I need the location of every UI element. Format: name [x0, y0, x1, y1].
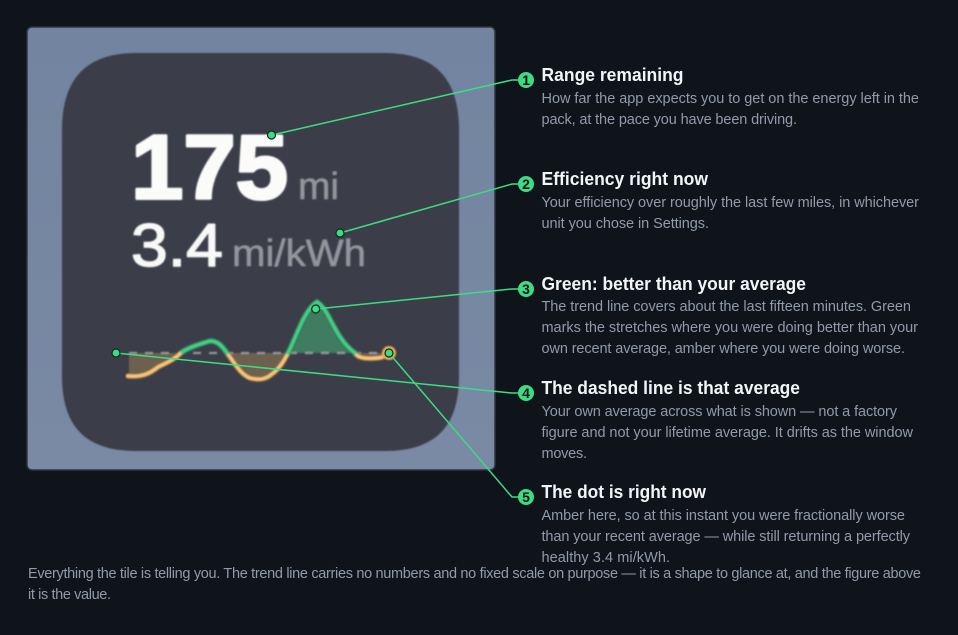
amber fill areas: [129, 352, 389, 379]
amber trend line: [128, 352, 389, 379]
caption: [28, 566, 921, 603]
rounded tile: [62, 53, 459, 451]
body 1: pack, at the pace you have been driving.: [542, 112, 797, 128]
efficiency figure: [131, 212, 366, 279]
green trend halo: [182, 302, 355, 353]
efficiency figure: 3.4: [131, 212, 223, 279]
body 5: Amber here, so at this instant you were fractionally worse: [542, 508, 905, 524]
body 4: [542, 404, 914, 462]
efficiency figure: mi/kWh: [232, 233, 366, 275]
panel: app tile screenshot: [27, 27, 495, 470]
badge 3: [518, 281, 534, 297]
body 5: [542, 508, 911, 566]
average dashed line: [129, 352, 389, 354]
callout 4: dashed line: [518, 378, 914, 462]
badge 4: [518, 385, 534, 401]
green fill area: [288, 302, 355, 353]
badge 2: [518, 176, 534, 192]
heading 1: Range remaining: [542, 65, 684, 85]
range figure: 175: [131, 118, 288, 218]
badge 5: 5: [522, 489, 530, 505]
badge 2: 2: [522, 176, 530, 192]
badge 1: [518, 72, 534, 88]
callout 1: range remaining: [518, 65, 919, 128]
heading 3: Green: better than your average: [542, 274, 806, 294]
body 4: Your own average across what is shown — not a factory: [542, 404, 898, 420]
caption: Everything the tile is telling you. The trend line carries no numbers and no fixed scale on purpose — it is a shape to glance at, and the figure above: [28, 566, 921, 582]
body 5: healthy 3.4 mi/kWh.: [542, 550, 670, 566]
amber trend halo: [128, 352, 389, 379]
badge 4: 4: [522, 385, 530, 401]
body 1: [542, 91, 919, 128]
badge 3: 3: [522, 281, 530, 297]
green trend line: [182, 302, 355, 353]
body 4: figure and not your lifetime average. It drifts as the window: [542, 425, 914, 441]
caption: it is the value.: [28, 587, 111, 603]
leader lines: [116, 80, 518, 497]
callout 5: the dot: [518, 482, 911, 566]
range figure: mi: [298, 166, 339, 208]
anchor dots: [112, 131, 393, 357]
tile background: [27, 27, 495, 470]
callout 3: green: [518, 274, 918, 357]
heading 5: The dot is right now: [542, 482, 707, 502]
sparkline: [128, 302, 396, 379]
body 5: than your recent average — while still returning a perfectly: [542, 529, 911, 545]
body 2: Your efficiency over roughly the last few miles, in whichever: [542, 195, 919, 211]
body 3: [542, 299, 918, 357]
callout 2: efficiency right now: [518, 169, 919, 232]
badge 1: 1: [522, 72, 530, 88]
current dot: [382, 346, 396, 360]
body 3: marks the stretches where you were doing better than your: [542, 320, 918, 336]
body 3: own recent average, amber where you were doing worse.: [542, 341, 905, 357]
body 2: [542, 195, 919, 232]
heading 2: Efficiency right now: [542, 169, 709, 189]
body 4: moves.: [542, 446, 587, 462]
body 1: How far the app expects you to get on the energy left in the: [542, 91, 919, 107]
body 3: The trend line covers about the last fifteen minutes. Green: [542, 299, 911, 315]
body 2: unit you chose in Settings.: [542, 216, 709, 232]
badge 5: [518, 489, 534, 505]
heading 4: The dashed line is that average: [542, 378, 800, 398]
